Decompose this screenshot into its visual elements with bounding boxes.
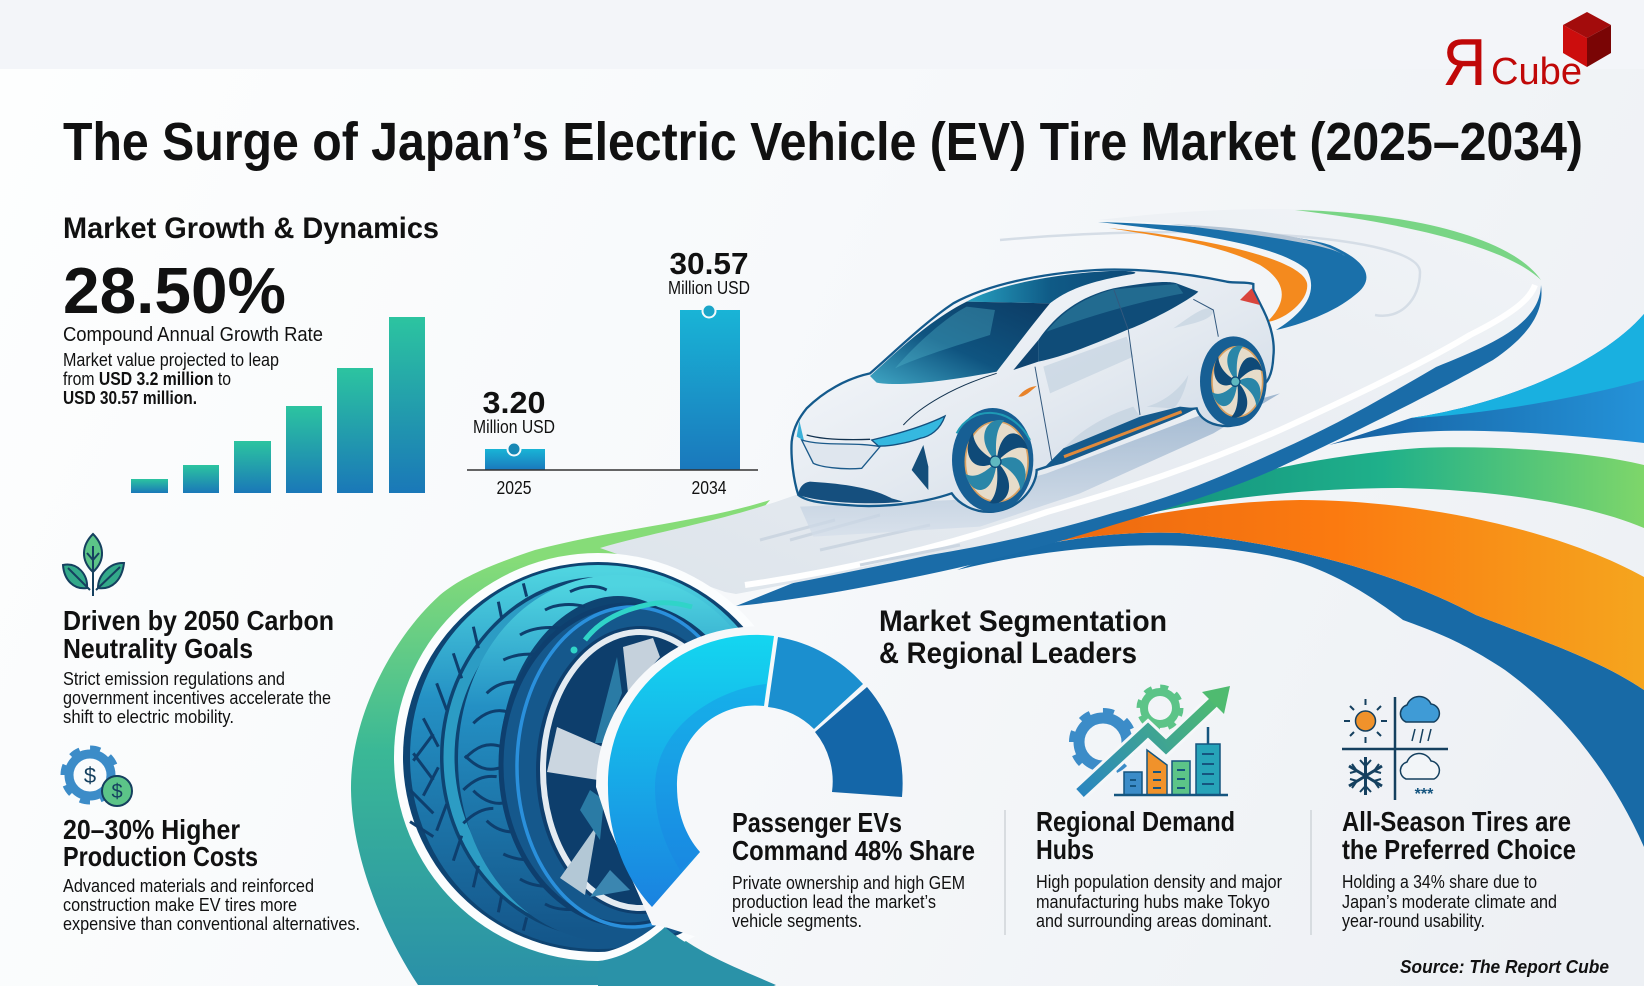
block: passenger EVs: Command 48% Share [732, 835, 975, 866]
car windshield [870, 302, 1050, 384]
icon: gears, buildings and arrow [1072, 686, 1230, 795]
heading: All-Season Tires are [1342, 806, 1571, 837]
car side window [1038, 282, 1198, 362]
comparison chart 2025 vs 2034 [467, 246, 758, 498]
swoosh: dark blue lower [957, 533, 1644, 847]
teal swoosh below tire [598, 927, 776, 986]
heading: market segmentation: & Regional Leaders [879, 637, 1137, 670]
description: Strict emission regulations and [63, 668, 285, 689]
segment: passenger EVs 48% [608, 635, 774, 907]
swoosh: left green and teal around tire [351, 500, 776, 985]
side intake [912, 445, 928, 490]
description: expensive than conventional alternatives. [63, 913, 360, 934]
block: all-season tires [1342, 696, 1576, 931]
tire casing [403, 562, 793, 952]
car body [791, 270, 1274, 512]
source note: Source: The Report Cube [1400, 957, 1609, 977]
comparison chart 2025 vs 2034: 2034 [692, 478, 726, 498]
heading: market segmentation [879, 605, 1167, 670]
logo: RCube [1443, 12, 1611, 99]
front wheel [952, 408, 1033, 512]
description: vehicle segments. [732, 910, 862, 931]
road swoosh: orange [1109, 228, 1307, 322]
CAGR number: 28.50% [63, 254, 286, 327]
tire lower-right cut [598, 921, 668, 957]
headlight [872, 416, 945, 446]
block: production costs: Production Costs [63, 841, 258, 872]
tread groove pattern upper [410, 583, 607, 837]
comparison chart 2025 vs 2034: 3.20 [482, 385, 546, 420]
CAGR label: Compound Annual Growth Rate [63, 324, 323, 346]
swoosh: green [1120, 447, 1644, 528]
description: shift to electric mobility. [63, 706, 234, 727]
description [1036, 871, 1282, 931]
block: passenger EVs [732, 807, 975, 931]
car door lines [1035, 290, 1218, 460]
segment inner shade [655, 684, 766, 870]
panel: market growth and dynamics [63, 212, 758, 498]
heading: Market Growth & Dynamics [63, 212, 439, 245]
icon: leaves [63, 534, 124, 596]
block: regional demand hubs: Hubs [1036, 834, 1094, 865]
tire illustration [394, 553, 802, 986]
description [63, 668, 331, 727]
car shadow [800, 393, 1280, 537]
comparison chart 2025 vs 2034: 2025 [496, 478, 532, 498]
wheel rim [536, 626, 744, 914]
sidewall blue line [517, 607, 747, 927]
description [732, 872, 965, 931]
block: carbon neutrality [63, 534, 334, 727]
icon: gear and coin: $ [84, 763, 96, 788]
description: Advanced materials and reinforced [63, 875, 314, 896]
heading: 20–30% Higher [63, 814, 240, 845]
segment: second [768, 637, 863, 729]
icon: four seasons weather [1342, 696, 1448, 803]
heading: Passenger EVs [732, 807, 902, 838]
tread centre band [449, 585, 761, 929]
swoosh: blue and cyan sail [1329, 314, 1644, 445]
growth bars [131, 317, 425, 493]
description: High population density and major [1036, 871, 1282, 892]
CAGR description: from USD 3.2 million to [63, 368, 231, 389]
logo: RCube: Cube [1491, 51, 1582, 93]
block: regional demand hubs [1036, 686, 1282, 931]
block: carbon neutrality: Neutrality Goals [63, 633, 253, 664]
donut chart: passenger EV share [596, 626, 918, 948]
road swoosh: green edge [1295, 210, 1541, 280]
lower intake [798, 482, 903, 503]
shoulder line [903, 373, 997, 425]
road swoosh: blue [1098, 222, 1366, 330]
comparison chart 2025 vs 2034: Million USD [473, 417, 555, 437]
tread outer lug ring [425, 571, 771, 943]
side body shading [1043, 308, 1213, 457]
description: government incentives accelerate the [63, 687, 331, 708]
hood line [807, 435, 870, 440]
description [63, 875, 360, 934]
tread inner lug ring [479, 586, 757, 932]
description: production lead the market’s [732, 891, 936, 912]
description: Japan’s moderate climate and [1342, 891, 1557, 912]
description: manufacturing hubs make Tokyo [1036, 891, 1270, 912]
car illustration [791, 270, 1280, 537]
tire halo [394, 553, 802, 961]
description: construction make EV tires more [63, 894, 297, 915]
heading: Driven by 2050 Carbon [63, 605, 334, 636]
front grille [802, 440, 880, 469]
donut halo [596, 626, 918, 948]
tread groove pattern lower [413, 734, 585, 931]
icon: gear and coin [64, 749, 132, 806]
icon: four seasons weather: *** [1415, 786, 1434, 803]
heading: Regional Demand [1036, 806, 1235, 837]
swoosh: orange [957, 500, 1644, 690]
logo cube [1563, 12, 1611, 67]
road [600, 209, 1542, 606]
description: and surrounding areas dominant. [1036, 910, 1272, 931]
description: Private ownership and high GEM [732, 872, 965, 893]
car orange accent [1018, 386, 1037, 397]
road swoosh: pale edge [1170, 224, 1345, 256]
logo: RCube: Я [1443, 25, 1486, 99]
tail light [1240, 288, 1260, 305]
comparison chart 2025 vs 2034: 30.57 [670, 246, 748, 281]
rear wheel [1200, 336, 1267, 426]
car roof [967, 271, 1135, 303]
block: all-season tires: the Preferred Choice [1342, 834, 1576, 865]
description: year-round usability. [1342, 910, 1485, 931]
pillar dark section [1013, 340, 1038, 370]
segment: third [815, 687, 903, 797]
sidewall teal accent [570, 603, 692, 654]
heading: market segmentation: Market Segmentation [879, 605, 1167, 638]
description: Holding a 34% share due to [1342, 871, 1537, 892]
bottom strip [0, 986, 1644, 993]
CAGR description: Market value projected to leap [63, 349, 279, 370]
icon: gear and coin: $ [111, 781, 123, 803]
block: production costs [63, 749, 360, 934]
description [1342, 871, 1557, 931]
CAGR description [63, 349, 279, 408]
car sill [1043, 407, 1197, 468]
sidewall [501, 605, 755, 925]
CAGR description: USD 30.57 million. [63, 387, 197, 408]
comparison chart 2025 vs 2034: Million USD [668, 278, 750, 298]
